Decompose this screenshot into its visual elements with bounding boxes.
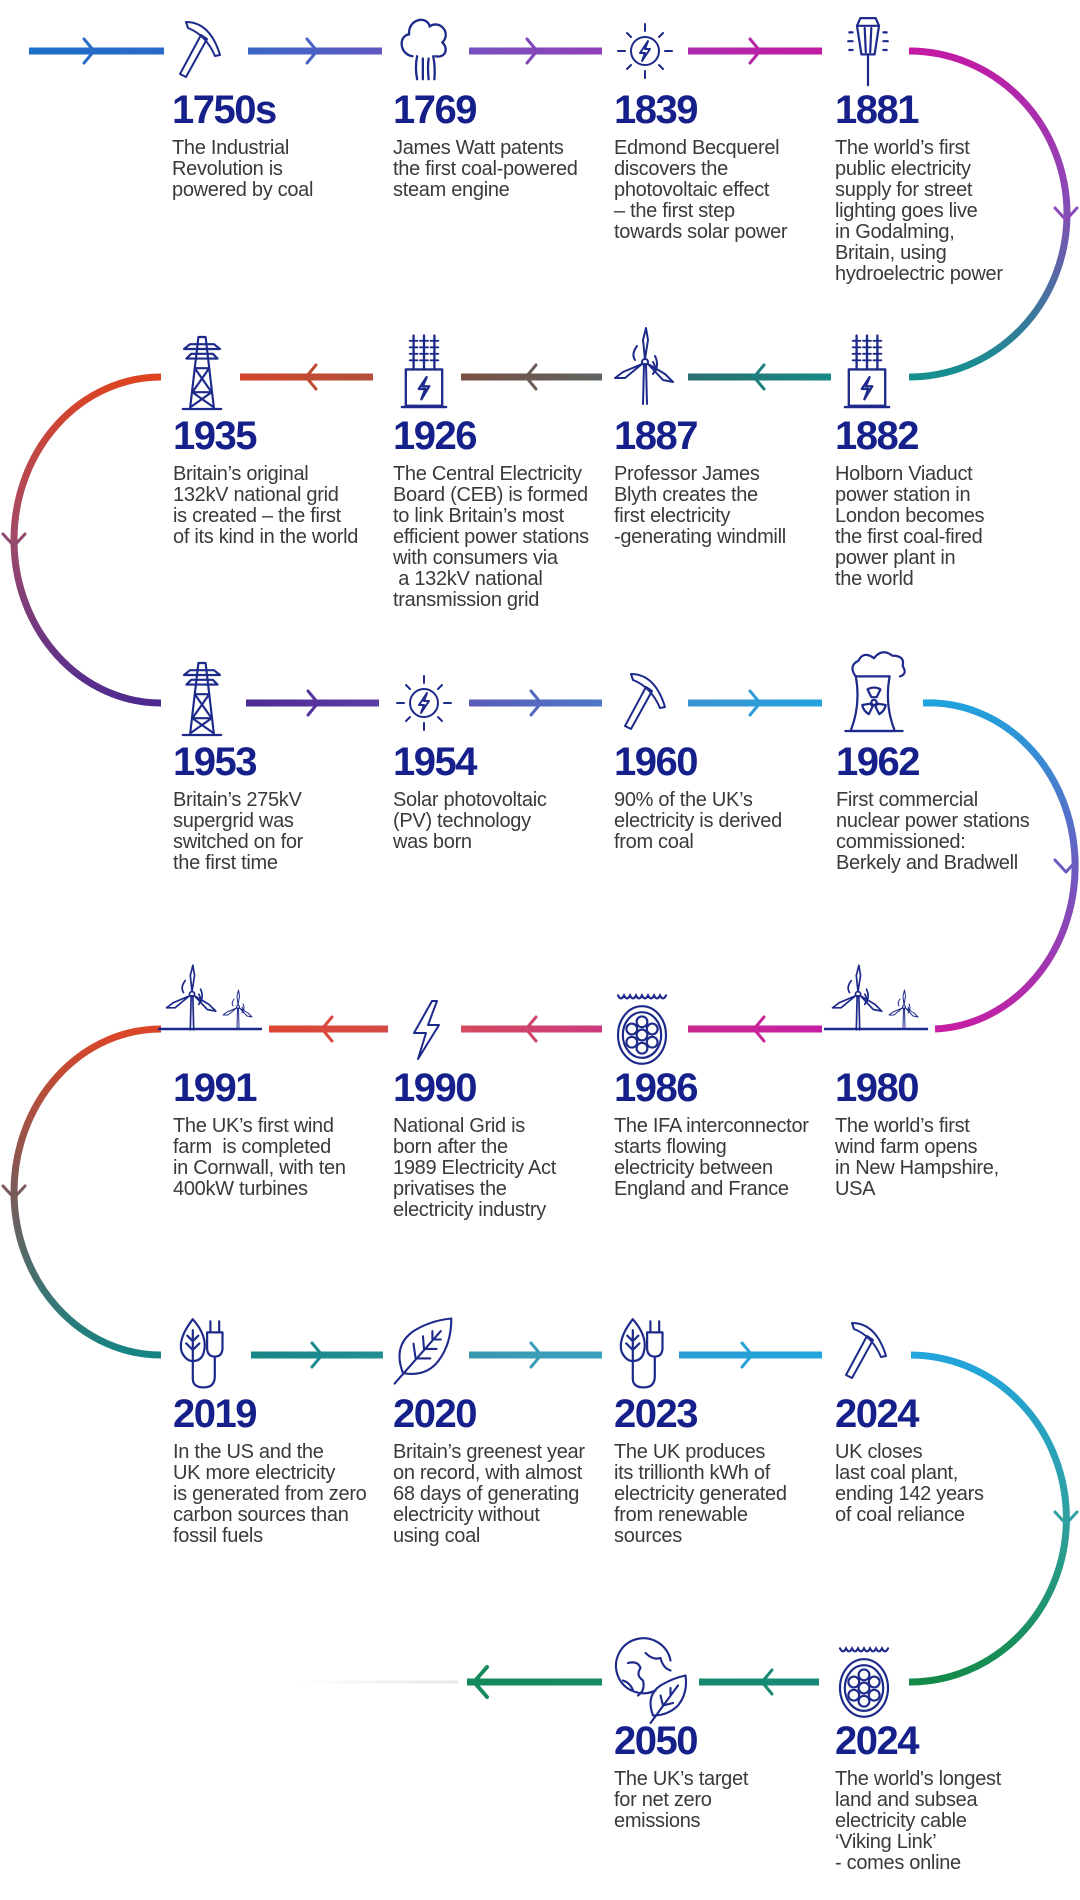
item 1990: privatises the — [393, 1178, 507, 1200]
item 1750s: The Industrial — [172, 137, 289, 159]
item 1887 — [614, 414, 786, 548]
item 1887: Blyth creates the — [614, 484, 758, 506]
item 1980: USA — [835, 1178, 875, 1200]
item 1954 — [393, 740, 547, 853]
icon: leaf 2020 — [395, 1318, 451, 1384]
item 1769 — [393, 88, 578, 201]
item 1750s: 1750s — [172, 88, 276, 132]
item 1839 — [614, 88, 788, 243]
item 1887: first electricity — [614, 505, 730, 527]
item 1990: 1990 — [393, 1066, 476, 1110]
item 2020 — [393, 1392, 585, 1547]
item 1750s: powered by coal — [172, 179, 313, 201]
item 1926: to link Britain’s most — [393, 505, 564, 527]
item 1926: Board (CEB) is formed — [393, 484, 588, 506]
item 2023 — [614, 1392, 787, 1547]
item 1926 — [393, 414, 589, 611]
item 2050: The UK’s target — [614, 1768, 748, 1790]
item 1769: 1769 — [393, 88, 476, 132]
item 1882: power station in — [835, 484, 970, 506]
item 2050: for net zero — [614, 1789, 712, 1811]
item 1953 — [173, 740, 303, 874]
item 2023: The UK produces — [614, 1441, 765, 1463]
item 1881 — [835, 88, 1003, 285]
item 2023: 2023 — [614, 1392, 697, 1436]
item 1990 — [393, 1066, 556, 1221]
item 1839: photovoltaic effect — [614, 179, 769, 201]
item 2023: sources — [614, 1525, 682, 1547]
icon: steam cloud 1769 — [402, 20, 446, 79]
item 1991: The UK’s first wind — [173, 1115, 334, 1137]
item 1839: towards solar power — [614, 221, 787, 243]
item 1887: -generating windmill — [614, 526, 786, 548]
item 2050: 2050 — [614, 1719, 697, 1763]
item 1882: the world — [835, 568, 913, 590]
item 1882: London becomes — [835, 505, 984, 527]
item 2019: In the US and the — [173, 1441, 324, 1463]
item 1935: is created – the first — [173, 505, 341, 527]
item 2023: from renewable — [614, 1504, 748, 1526]
item 1962 — [836, 740, 1030, 874]
icon: subsea cable 2024 — [840, 1648, 888, 1717]
item 2024 coal: 2024 — [835, 1392, 918, 1436]
item 1769: steam engine — [393, 179, 509, 201]
icon: wind turbine 1887 — [615, 328, 673, 404]
item 1991: in Cornwall, with ten — [173, 1157, 346, 1179]
item 2024 viking: - comes online — [835, 1852, 961, 1874]
item 1926: 1926 — [393, 414, 476, 458]
item 1991: 1991 — [173, 1066, 256, 1110]
item 1962: commissioned: — [836, 831, 965, 853]
item 1926: a 132kV national — [398, 568, 542, 590]
item 1954: was born — [393, 831, 472, 853]
item 1882: power plant in — [835, 547, 955, 569]
item 1986: The IFA interconnector — [614, 1115, 809, 1137]
icon: sun 1839 — [618, 24, 672, 78]
item 2023: electricity generated — [614, 1483, 787, 1505]
item 1882: 1882 — [835, 414, 918, 458]
item 1980: in New Hampshire, — [835, 1157, 999, 1179]
item 2019: fossil fuels — [173, 1525, 263, 1547]
item 2024 viking — [835, 1719, 1002, 1874]
item 1926: transmission grid — [393, 589, 539, 611]
item 1839: discovers the — [614, 158, 728, 180]
item 2020: electricity without — [393, 1504, 540, 1526]
icon: transformer 1882 — [845, 336, 889, 407]
item 1960: 1960 — [614, 740, 697, 784]
item 1935: of its kind in the world — [173, 526, 358, 548]
item 1926: with consumers via — [393, 547, 558, 569]
item 2019: carbon sources than — [173, 1504, 349, 1526]
item 1990: born after the — [393, 1136, 508, 1158]
item 1887: 1887 — [614, 414, 697, 458]
item 1980: The world’s first — [835, 1115, 970, 1137]
item 1881: hydroelectric power — [835, 263, 1003, 285]
item 1887: Professor James — [614, 463, 760, 485]
item 2024 coal: of coal reliance — [835, 1504, 965, 1526]
item 1839: – the first step — [614, 200, 735, 222]
item 1769: the first coal-powered — [393, 158, 578, 180]
item 1881: in Godalming, — [835, 221, 954, 243]
item 1881: public electricity — [835, 158, 971, 180]
item 1953: switched on for — [173, 831, 303, 853]
item 2019: 2019 — [173, 1392, 256, 1436]
item 1962: First commercial — [836, 789, 978, 811]
item 1769: James Watt patents — [393, 137, 564, 159]
item 1960: from coal — [614, 831, 694, 853]
item 1935: 132kV national grid — [173, 484, 339, 506]
item 1935 — [173, 414, 358, 548]
item 2020: 68 days of generating — [393, 1483, 579, 1505]
item 1986: electricity between — [614, 1157, 773, 1179]
item 1960: 90% of the UK’s — [614, 789, 753, 811]
icon: pylon 1935 — [183, 337, 221, 409]
icon: globe leaf 2050 — [616, 1638, 686, 1723]
icon: leaf plug 2019 — [181, 1319, 222, 1387]
item 1980: 1980 — [835, 1066, 918, 1110]
item 2020: Britain’s greenest year — [393, 1441, 585, 1463]
item 1926: The Central Electricity — [393, 463, 582, 485]
item 1986: England and France — [614, 1178, 789, 1200]
item 1882: the first coal-fired — [835, 526, 982, 548]
icon: street lamp 1881 — [848, 18, 888, 85]
item 2020: using coal — [393, 1525, 480, 1547]
icon: pickaxe 1750s — [180, 22, 220, 77]
item 1881: supply for street — [835, 179, 972, 201]
item 2024 viking: electricity cable — [835, 1810, 967, 1832]
item 1953: Britain’s 275kV — [173, 789, 302, 811]
item 2019: UK more electricity — [173, 1462, 335, 1484]
item 1980 — [835, 1066, 999, 1200]
item 2020: 2020 — [393, 1392, 476, 1436]
item 1991: farm is completed — [173, 1136, 331, 1158]
item 1960: electricity is derived — [614, 810, 782, 832]
item 1882: Holborn Viaduct — [835, 463, 972, 485]
item 1986 — [614, 1066, 809, 1200]
icon: pickaxe 2024 — [846, 1323, 886, 1378]
icon: pickaxe 1960 — [625, 674, 665, 729]
item 1881: lighting goes live — [835, 200, 977, 222]
item 1954: (PV) technology — [393, 810, 531, 832]
item 2024 coal — [835, 1392, 984, 1526]
item 2019 — [173, 1392, 366, 1547]
icon: leaf plug 2023 — [621, 1319, 662, 1387]
item 1980: wind farm opens — [835, 1136, 977, 1158]
item 1881: The world’s first — [835, 137, 970, 159]
item 2050: emissions — [614, 1810, 700, 1832]
item 2024 viking: The world's longest — [835, 1768, 1001, 1790]
item 2024 coal: UK closes — [835, 1441, 922, 1463]
item 1954: Solar photovoltaic — [393, 789, 547, 811]
item 1962: 1962 — [836, 740, 919, 784]
item 2050 — [614, 1719, 748, 1832]
item 2024 coal: last coal plant, — [835, 1462, 958, 1484]
item 1839: 1839 — [614, 88, 697, 132]
item 1962: nuclear power stations — [836, 810, 1030, 832]
item 1986: starts flowing — [614, 1136, 727, 1158]
item 1991: 400kW turbines — [173, 1178, 308, 1200]
item 2024 viking: land and subsea — [835, 1789, 977, 1811]
item 1990: 1989 Electricity Act — [393, 1157, 556, 1179]
icon: wind farm 1980 — [824, 965, 928, 1030]
item 1990: electricity industry — [393, 1199, 546, 1221]
item 2024 coal: ending 142 years — [835, 1483, 984, 1505]
item 1750s: Revolution is — [172, 158, 283, 180]
item 1881: 1881 — [835, 88, 918, 132]
item 1882 — [835, 414, 984, 590]
item 1935: Britain’s original — [173, 463, 308, 485]
icon: subsea cable 1986 — [618, 995, 666, 1064]
icon: lightning bolt 1990 — [414, 1001, 439, 1059]
item 1962: Berkely and Bradwell — [836, 852, 1018, 874]
item 1926: efficient power stations — [393, 526, 589, 548]
item 2020: on record, with almost — [393, 1462, 582, 1484]
icon: transformer 1926 — [402, 336, 446, 407]
item 1986: 1986 — [614, 1066, 697, 1110]
icon: pylon 1953 — [183, 663, 221, 735]
item 1953: the first time — [173, 852, 278, 874]
item 1750s — [172, 88, 313, 201]
icon: sun 1954 — [397, 676, 451, 730]
item 1954: 1954 — [393, 740, 476, 784]
item 2024 viking: 2024 — [835, 1719, 918, 1763]
item 2024 viking: ‘Viking Link’ — [835, 1831, 936, 1853]
item 1881: Britain, using — [835, 242, 946, 264]
item 1991 — [173, 1066, 346, 1200]
icon: wind farm 1991 — [158, 965, 262, 1030]
item 1960 — [614, 740, 782, 853]
item 1953: supergrid was — [173, 810, 294, 832]
item 1839: Edmond Becquerel — [614, 137, 779, 159]
item 1935: 1935 — [173, 414, 256, 458]
item 2019: is generated from zero — [173, 1483, 366, 1505]
item 1953: 1953 — [173, 740, 256, 784]
icon: nuclear plant 1962 — [845, 652, 905, 731]
item 2023: its trillionth kWh of — [614, 1462, 770, 1484]
item 1990: National Grid is — [393, 1115, 525, 1137]
